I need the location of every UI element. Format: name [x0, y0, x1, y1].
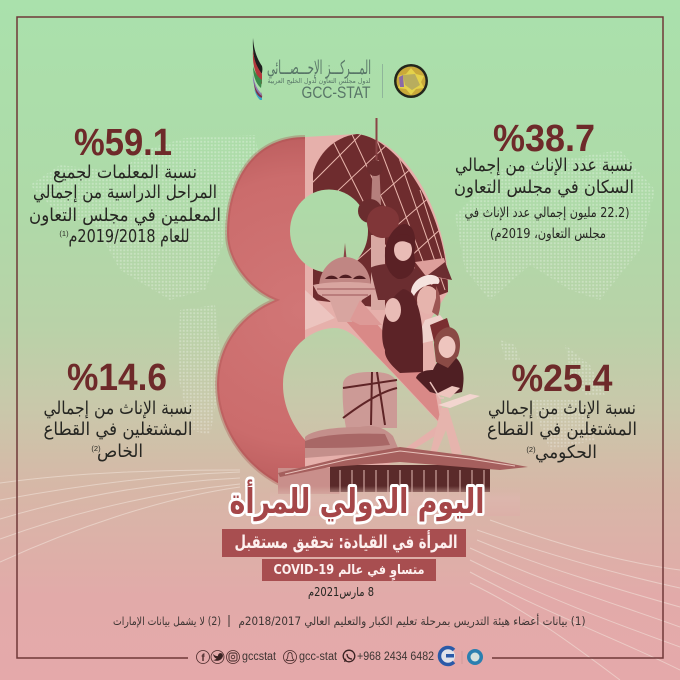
- second woman in hijab: [382, 289, 423, 373]
- description: للعام 2019/2018م: [68, 226, 190, 247]
- description: [29, 162, 221, 247]
- woman in hijab: [370, 224, 420, 300]
- subtitle banner 2: [262, 559, 436, 581]
- icon: whatsapp: [343, 650, 355, 662]
- icon: partner logo: [439, 647, 455, 664]
- pavilion building: [270, 447, 528, 516]
- description: المعلمين في مجلس التعاون: [29, 205, 221, 226]
- description: المراحل الدراسية من إجمالي: [33, 182, 217, 203]
- icon: facebook: f: [201, 653, 205, 664]
- saucer building: [305, 426, 398, 458]
- description: (1): [59, 229, 69, 238]
- description: (2): [526, 445, 536, 454]
- description: نسبة الإناث من إجمالي: [44, 398, 192, 419]
- 8 right half: [305, 134, 448, 492]
- logo arabic subtitle: لدول مجلس التعاون لدول الخليج العربية: [268, 77, 371, 85]
- saucer mosque: [305, 243, 382, 330]
- logo ribbon: [253, 38, 262, 100]
- icon: instagram: [226, 650, 240, 664]
- logo divider: [382, 64, 383, 98]
- phone number: +968 2434 6482: [357, 651, 434, 663]
- big number 8: [217, 130, 455, 492]
- logo: GCC-STAT: [253, 38, 428, 102]
- Kuwait towers: [358, 118, 399, 310]
- footnotes: [113, 613, 586, 629]
- icon: snapchat: [284, 650, 296, 664]
- icon: twitter: [211, 650, 224, 664]
- footnotes: (1) بيانات أعضاء هيئة التدريس بمرحلة تعليم الكبار والتعليم العالي 2018/2017م: [238, 613, 586, 629]
- footer contacts: [196, 647, 483, 665]
- stat: 59.1%: [29, 122, 221, 247]
- description: المشتغلين في القطاع: [487, 419, 637, 440]
- description: نسبة عدد الإناث من إجمالي: [455, 155, 633, 176]
- description: [44, 398, 192, 462]
- diagonal band: [347, 321, 440, 420]
- description: (2): [91, 444, 101, 453]
- value: %25.4: [512, 358, 612, 400]
- papers near woman: [415, 258, 450, 280]
- logo GCC-STAT wordmark: GCC-STAT: [302, 83, 370, 102]
- description: [454, 155, 634, 242]
- onion building: [343, 372, 397, 428]
- stat: 38.7%: [454, 118, 634, 242]
- woman writing: [416, 327, 480, 454]
- icon: facebook: [196, 650, 210, 664]
- icon: partner seal: [467, 649, 483, 665]
- world map dots: [30, 135, 655, 450]
- description: المشتغلين في القطاع: [44, 419, 192, 440]
- subtitle banner 1: [222, 529, 466, 557]
- value: %38.7: [493, 118, 595, 160]
- 8 left half: [217, 137, 305, 492]
- decorative curves: [0, 470, 680, 680]
- stat: 14.6%: [44, 357, 192, 462]
- women group: [370, 224, 480, 454]
- footnotes: (2) لا يشمل بيانات الإمارات: [113, 614, 221, 629]
- description: نسبة المعلمات لجميع: [53, 162, 197, 183]
- logo arabic title: المـــركـــز الإحـــصـــائي: [267, 57, 371, 79]
- description: مجلس التعاون، 2019م): [490, 226, 606, 242]
- woman with helmet: [411, 275, 450, 345]
- icon: GCC seal: [394, 64, 428, 98]
- stat: 25.4%: [487, 358, 637, 463]
- description: [487, 398, 637, 463]
- subtitle banner 1: المرأة في القيادة: تحقيق مستقبل: [234, 530, 458, 553]
- subtitle banner 2: متساوٍ في عالم COVID-19: [274, 563, 424, 581]
- description: نسبة الإناث من إجمالي: [488, 398, 636, 419]
- description: (22.2 مليون إجمالي عدد الإناث في: [464, 205, 630, 221]
- main title: اليوم الدولي للمرأة: [230, 479, 484, 522]
- value: %59.1: [74, 122, 172, 164]
- arched building: [313, 134, 448, 308]
- description: السكان في مجلس التعاون: [454, 177, 634, 198]
- description: الخاص: [97, 441, 143, 462]
- handle: gcc-stat: gcc-stat: [299, 651, 338, 663]
- inner shadow on left half: [217, 137, 305, 492]
- value: %14.6: [67, 357, 167, 399]
- date: 8 مارس2021م: [308, 585, 374, 600]
- description: الحكومي: [535, 442, 597, 463]
- handle: gccstat: gccstat: [242, 651, 277, 663]
